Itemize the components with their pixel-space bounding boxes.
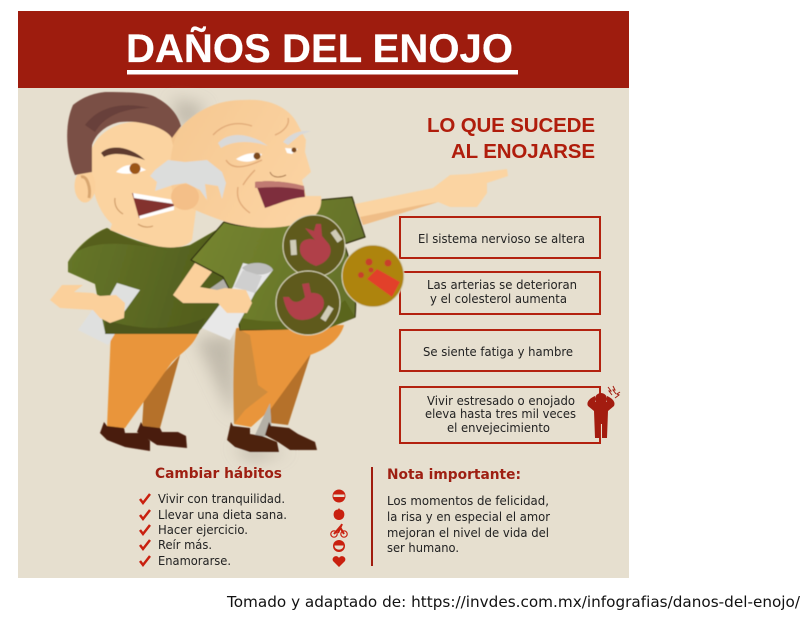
box: arterias [400,272,600,314]
icon: laughing face [333,540,345,552]
nose [270,172,286,177]
back leg [270,350,312,425]
side hair [150,160,226,200]
organ circle: heart [283,215,345,277]
soft shadows [172,98,290,462]
title underline [127,70,518,74]
box: fatiga [400,330,600,371]
divider [371,467,373,566]
heading: Cambiar hábitos [155,466,282,482]
organ circle: artery [342,245,404,307]
box: arterias: y el colesterol aumenta [430,292,567,306]
back leg [142,355,180,428]
shirt [68,225,225,332]
shirt [191,197,365,330]
note text: Los momentos de felicidad, [387,494,549,508]
heading: lo que sucede: LO QUE SUCEDE [427,114,595,137]
box: sistema nervioso [400,217,600,258]
icon: bicycle [331,524,347,537]
checklist [140,492,287,568]
checklist: Vivir con tranquilidad. [158,492,285,506]
checklist: Hacer ejercicio. [158,523,248,537]
section: nota importante [387,467,550,555]
brows [218,135,268,148]
wrinkles [213,118,288,213]
shoes [227,422,279,452]
front leg [234,325,344,427]
box: envejecimiento: el envejecimiento [447,421,550,435]
checklist: Reír más. [158,538,212,552]
source credit: Tomado y adaptado de: https://invdes.com.mx/infografias/danos-del-enojo/ [226,593,801,611]
shoes [100,422,150,451]
heading: lo que sucede: AL ENOJARSE [451,140,595,163]
checklist: Llevar una dieta sana. [158,508,287,522]
eyes [236,153,262,162]
head [91,122,198,248]
note text: la risa y en especial el amor [387,510,550,524]
arm and fist [50,285,125,323]
note text: mejoran el nivel de vida del [387,526,549,540]
organ circle: stomach [276,271,340,335]
title: DAÑOS DEL ENOJO [126,25,513,71]
box: envejecimiento: Vivir estresado o enojado [427,394,575,408]
scroll [202,263,273,340]
heading: Nota importante: [387,467,521,483]
hair [67,92,181,175]
box: arterias: Las arterias se deterioran [427,278,577,292]
scroll [78,275,148,345]
note text: ser humano. [387,541,459,555]
pointing arm [355,169,508,225]
icon: stressed figure [587,386,620,438]
young man [50,92,225,451]
header band [18,11,629,88]
ear [171,184,199,210]
head [170,100,321,228]
mouth [255,181,305,208]
front leg [107,328,200,428]
illustration: two angry men [50,92,508,462]
icon: apple [334,508,344,520]
box: sistema nervioso: El sistema nervioso se altera [418,232,585,246]
brow and eye [101,148,145,160]
box: envejecimiento: eleva hasta tres mil veces [425,407,576,421]
panel: background [18,11,629,578]
box: fatiga: Se siente fatiga y hambre [423,345,573,359]
section: cambiar habitos [140,466,347,568]
old man [150,100,508,452]
icon: headphones face [332,490,346,502]
gap between legs [254,403,272,437]
hand and forearm [173,263,252,313]
scroll back [205,276,232,298]
icon: heart [333,556,345,567]
note text [387,494,550,555]
ear [74,170,96,202]
box: envejecimiento [400,387,600,443]
wrinkle [115,198,153,227]
checklist: Enamorarse. [158,554,231,568]
mouth [132,193,174,218]
heading: lo que sucede [427,114,595,163]
scroll front [105,283,140,315]
